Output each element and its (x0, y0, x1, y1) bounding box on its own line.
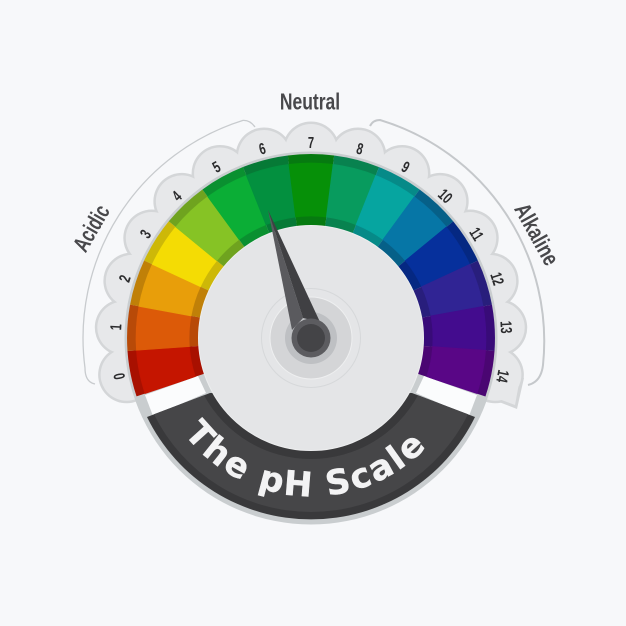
title text: The pH Scale (189, 417, 424, 497)
segment pH 3 (143, 221, 323, 358)
segment pH 9 (291, 166, 420, 349)
scale numbers (106, 133, 516, 385)
white gap left (145, 376, 206, 416)
segment pH 5 (202, 166, 331, 349)
scale numbers: 10 (435, 185, 457, 207)
segment pH 11 (299, 221, 479, 358)
segment pH 0 (126, 315, 316, 397)
segment pH 7 (288, 154, 334, 338)
scale numbers: 12 (487, 270, 508, 288)
scale numbers: 2 (115, 273, 134, 284)
segment pH 6 (243, 154, 333, 344)
dark title band (147, 393, 475, 519)
colour segments (126, 154, 496, 397)
inner dial disc (198, 226, 424, 450)
scale numbers: 3 (136, 226, 155, 241)
scale numbers: 13 (497, 320, 516, 334)
dial hub rings (262, 288, 360, 388)
segment pH 2 (129, 260, 318, 360)
needle (268, 210, 320, 330)
segment pH 8 (289, 154, 379, 344)
segment pH 12 (304, 260, 493, 360)
scale numbers: 14 (493, 368, 513, 385)
scale numbers: 6 (257, 139, 268, 158)
segment pH 1 (126, 305, 312, 361)
scale numbers: 8 (355, 139, 366, 158)
number petals (93, 121, 529, 409)
needle hub (292, 318, 330, 358)
scale numbers: 9 (399, 157, 413, 176)
heading: Acidic: Acidic (69, 201, 115, 256)
segment pH 4 (168, 188, 328, 354)
scale numbers: 1 (106, 323, 125, 331)
scale numbers: 11 (466, 224, 488, 244)
scale numbers: 7 (308, 133, 314, 151)
segment pH 10 (294, 188, 454, 354)
outer gray ring (124, 152, 498, 524)
scale numbers: 5 (209, 157, 224, 176)
heading: Alkaline: Alkaline (509, 199, 563, 270)
label: Acidic bracket (83, 120, 255, 384)
scale numbers: 4 (168, 187, 185, 205)
scale numbers: 0 (109, 371, 129, 381)
segment pH 13 (310, 305, 496, 361)
heading: Neutral: Neutral (280, 90, 340, 115)
segment pH 14 (306, 315, 496, 397)
label: Alkaline bracket (370, 120, 544, 385)
white gap right (416, 376, 477, 416)
